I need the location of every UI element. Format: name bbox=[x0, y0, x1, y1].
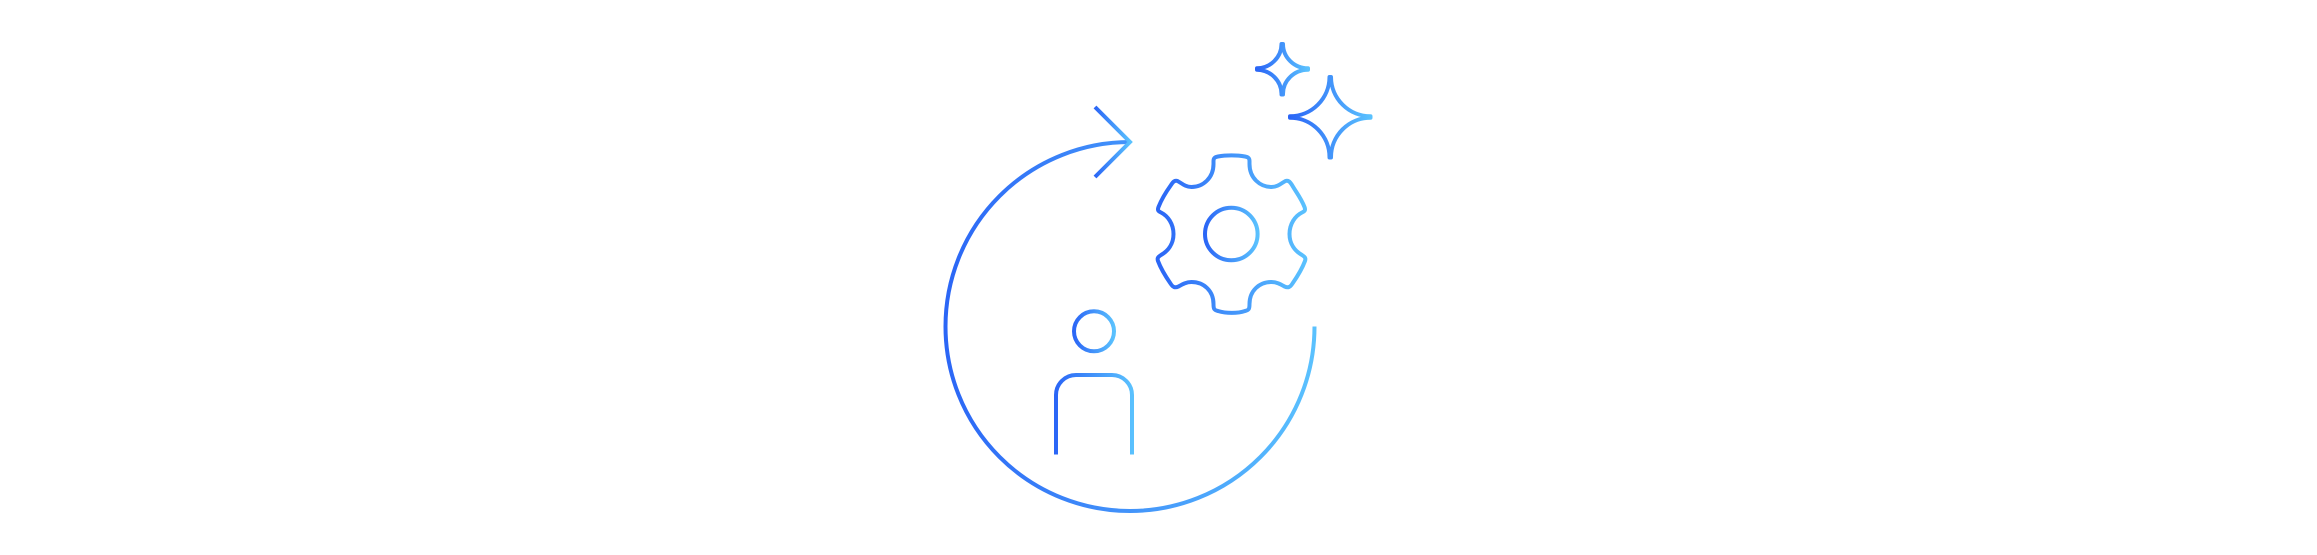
circular arc bbox=[946, 142, 1314, 511]
gear hub bbox=[1205, 208, 1258, 260]
person head bbox=[1074, 311, 1114, 351]
icon: large sparkle bbox=[1290, 77, 1370, 158]
icon: small sparkle bbox=[1257, 44, 1308, 94]
cycle arrow bbox=[946, 107, 1314, 511]
person body bbox=[1056, 375, 1132, 454]
icon: gear bbox=[1158, 155, 1305, 313]
gear outline bbox=[1158, 155, 1305, 313]
icon: person bbox=[1056, 311, 1132, 454]
arrowhead bbox=[1095, 107, 1130, 177]
